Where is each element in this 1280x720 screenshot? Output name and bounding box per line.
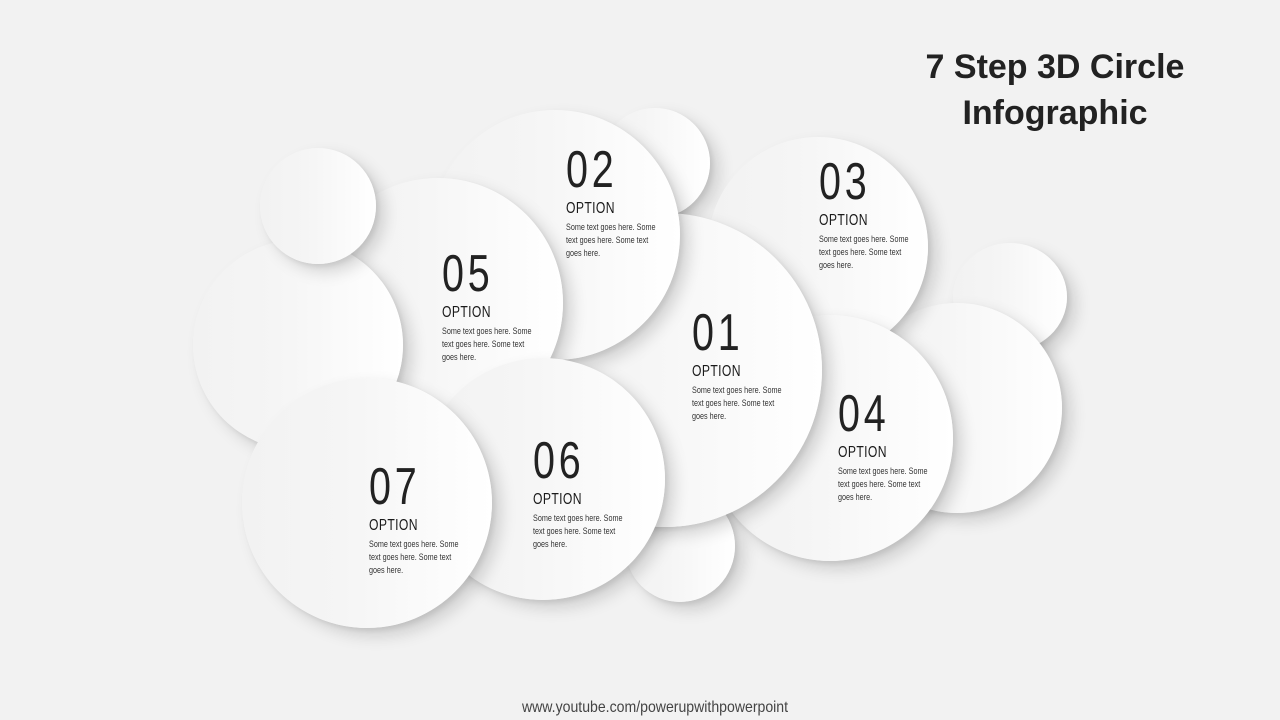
circle: 06: [421, 358, 665, 600]
circle: 03: [708, 137, 928, 357]
circle: small top behind 02: [600, 108, 710, 218]
text: 02: 02: [566, 141, 618, 199]
title: 7 Step 3D Circle: [926, 48, 1184, 86]
text: OPTION: [442, 304, 491, 321]
text: OPTION: [838, 444, 887, 461]
footer url: www.youtube.com/powerupwithpowerpoint: [522, 699, 788, 716]
circle: small right: [953, 243, 1067, 351]
text: 07: 07: [369, 458, 421, 516]
text: Some text goes here. Some text goes here. Some text goes here.: [692, 385, 782, 422]
circle: 05: [313, 178, 563, 428]
text: OPTION: [566, 200, 615, 217]
text: 04: [838, 385, 928, 503]
text: 06: 06: [533, 432, 585, 490]
circle: left big: [193, 240, 403, 450]
circle: 01: [508, 213, 822, 527]
text: Some text goes here. Some text goes here. Some text goes here.: [533, 513, 623, 550]
text: Some text goes here. Some text goes here. Some text goes here.: [838, 466, 928, 503]
circle: 04: [707, 315, 953, 561]
text: 03: [819, 153, 909, 271]
text: OPTION: [692, 363, 741, 380]
text: 04: 04: [838, 385, 890, 443]
title: [926, 48, 1184, 132]
circle: 02: [430, 110, 680, 360]
text: 07: [369, 458, 459, 576]
circle: left small: [260, 148, 376, 264]
text: 05: [442, 245, 532, 363]
text: 01: 01: [692, 304, 744, 362]
text: Some text goes here. Some text goes here. Some text goes here.: [819, 234, 909, 271]
text: OPTION: [369, 517, 418, 534]
text: 02: [566, 141, 656, 259]
title: Infographic: [962, 94, 1148, 132]
text: Some text goes here. Some text goes here. Some text goes here.: [442, 326, 532, 363]
circle: right behind 04: [852, 303, 1062, 513]
text: 05: 05: [442, 245, 494, 303]
text: OPTION: [819, 212, 868, 229]
circle: 07: [242, 378, 492, 628]
circle: small bottom: [625, 490, 735, 602]
text: 01: [692, 304, 782, 422]
text: 03: 03: [819, 153, 871, 211]
text: Some text goes here. Some text goes here. Some text goes here.: [369, 539, 459, 576]
text: 06: [533, 432, 623, 550]
text: Some text goes here. Some text goes here. Some text goes here.: [566, 222, 656, 259]
text: OPTION: [533, 491, 582, 508]
